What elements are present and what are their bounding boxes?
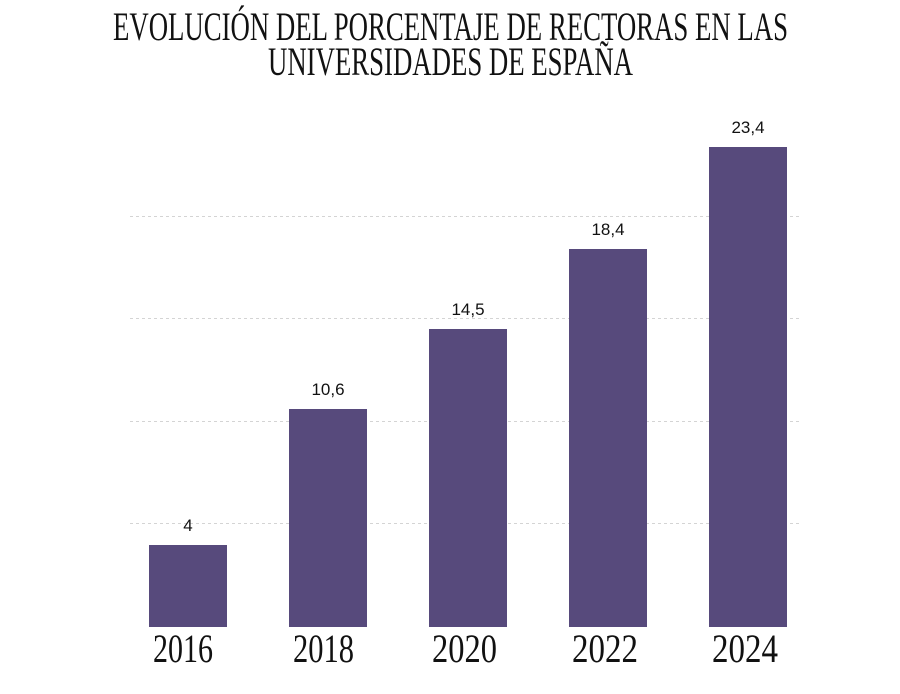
x axis year labels: 2018 xyxy=(293,626,354,671)
title: UNIVERSIDADES DE ESPAÑA xyxy=(268,39,633,84)
x axis year labels: 2024 xyxy=(712,626,778,671)
bar: 2022 xyxy=(569,220,647,627)
x axis year labels xyxy=(153,626,778,671)
x axis year labels: 2016 xyxy=(153,626,213,671)
bar: 2018: 10,6 xyxy=(311,380,345,399)
bar: 2020 xyxy=(429,300,507,627)
bar: 2016: 4 xyxy=(183,516,193,535)
bar: 2018 xyxy=(289,380,367,627)
bar: 2020: 14,5 xyxy=(451,300,485,319)
bar: 2024: 23,4 xyxy=(731,118,765,137)
bar: 2024 xyxy=(709,118,787,627)
bar chart xyxy=(149,118,787,627)
bar: 2022: 18,4 xyxy=(591,220,625,239)
title xyxy=(113,4,788,84)
x axis year labels: 2022 xyxy=(572,626,638,671)
x axis year labels: 2020 xyxy=(432,626,497,671)
bar: 2016 xyxy=(149,516,227,627)
